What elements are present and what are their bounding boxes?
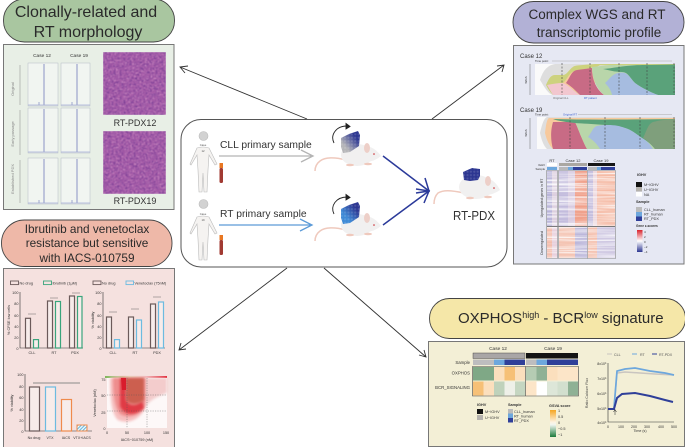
icon: CLL patient: Case: [200, 143, 207, 147]
heading: clonally-related and RT morphology: Clonally-related and: [15, 4, 157, 21]
GSVA heatmap: BCR_SIGNALING: [435, 385, 471, 390]
heading: OXPHOS high BCR low signature: high: [522, 310, 539, 320]
signature legend: −0.5: [558, 427, 566, 431]
arrow: center to morphology: [180, 66, 307, 119]
bar chart: venetoclax: 100: [95, 291, 102, 295]
signature legend: CLL_human: [514, 410, 535, 414]
bar chart: ibrutinib: 40: [14, 325, 18, 329]
synergy contour map: [93, 376, 169, 442]
heatmap legend: IGHV: [637, 173, 647, 177]
synergy contour map: Venetoclax (nM): [93, 389, 97, 417]
heatmap legend: M−IGHV: [644, 183, 659, 187]
synergy contour map: IACS−010759 (nM): [121, 438, 154, 442]
signature legend: Sample: [508, 403, 522, 407]
calcium flux line chart: 300: [644, 425, 650, 429]
bar chart: venetoclax: 60: [97, 314, 102, 318]
label: RT-PDX19: RT-PDX19: [114, 196, 156, 206]
synergy contour map: 50: [101, 394, 106, 398]
icon: RT patient: [190, 200, 217, 260]
synergy contour map: 100: [144, 431, 150, 435]
bar chart: combination: No drug: [28, 436, 40, 440]
signature legend: 0.5: [558, 415, 563, 419]
icon: engraftment arrow bottom: [333, 194, 350, 214]
bar chart: venetoclax: [91, 281, 167, 355]
bar chart: venetoclax: 80: [97, 302, 102, 306]
GSVA heatmap: Sample: [455, 360, 471, 365]
signature legend: GSVA score: [549, 404, 571, 408]
bar chart: combination: VTX+IACS: [73, 436, 91, 440]
calcium flux line chart: 400: [658, 425, 664, 429]
heading: complex WGS and RT transcriptomic profile: transcriptomic profile: [537, 25, 661, 40]
bar chart: venetoclax: PDX: [153, 351, 161, 355]
bar chart: venetoclax: No drug: [102, 282, 116, 286]
bar chart: venetoclax: 0: [99, 347, 102, 351]
signature legend: RT_PDX: [514, 419, 529, 423]
heatmap legend: NA: [644, 193, 650, 197]
heatmap legend: Sample: [636, 200, 650, 204]
signature legend: [477, 403, 571, 437]
clonal evolution fishplot: case 19: WGS: [524, 129, 528, 137]
synergy contour map: 0: [106, 431, 108, 435]
synergy contour map: 150: [163, 431, 169, 435]
heading: ibrutinib and venetoclax resistance: [2, 220, 172, 266]
clonal evolution fishplot: case 12: Original CLL: [553, 96, 569, 100]
calcium flux line chart: RT-PDX: [659, 353, 673, 357]
bar chart: ibrutinib: RT: [52, 351, 57, 355]
icon: RT patient: Case: [200, 212, 207, 216]
panel: drug response: [4, 268, 174, 447]
heatmap legend: U−IGHV: [644, 188, 659, 192]
heatmap legend: 2: [644, 235, 646, 239]
calcium flux line chart: Ratio Calcium Flux: [585, 378, 589, 408]
calcium flux line chart: Time (s): [633, 429, 647, 433]
heading: OXPHOS high BCR low signature: OXPHOS: [458, 310, 522, 327]
heading: ibrutinib and venetoclax resistance: with IACS-010759: [38, 251, 135, 265]
panel: signature: [428, 342, 684, 446]
GSVA heatmap: Case 12: [489, 346, 507, 352]
bar chart: ibrutinib: PDX: [71, 351, 79, 355]
bar chart: combination: 100: [17, 373, 24, 377]
heatmap legend: RT_human: [644, 212, 663, 216]
signature legend: 0: [558, 421, 560, 425]
icon: mouse with RT tumor: [315, 202, 381, 241]
signature legend: IGHV: [477, 403, 487, 407]
arrow: center to genomic profile: [432, 65, 504, 119]
calcium flux line chart: CLL: [614, 353, 621, 357]
calcium flux line chart: 200: [631, 425, 637, 429]
label: RT-PDX: RT-PDX: [453, 208, 495, 223]
clonality spectra plots: [10, 53, 90, 204]
arrow: CLL sample to mouse: [219, 150, 313, 162]
clonal evolution fishplot: case 19: Case 19: [520, 108, 543, 114]
clonal evolution fishplot: case 12: WGS: [524, 76, 528, 84]
bar chart: combination: 0: [21, 430, 24, 434]
bar chart: ibrutinib: 60: [14, 314, 18, 318]
calcium flux line chart: RT: [640, 353, 646, 357]
bar chart: ibrutinib: 20: [14, 336, 18, 340]
signature legend: M−IGHV: [485, 410, 500, 414]
heatmap legend: 0: [644, 240, 646, 244]
bar chart: ibrutinib: CLL: [29, 351, 35, 355]
bar chart: combination: [10, 373, 92, 440]
icon: CLL blood tube: [220, 163, 223, 183]
heading: complex WGS and RT transcriptomic profile: [513, 2, 684, 43]
clonality spectra plots: Early passage: [10, 121, 15, 147]
bar chart: venetoclax: RT: [132, 351, 138, 355]
expression heatmap: RT: [549, 158, 555, 163]
label: RT primary sample: RT primary sample: [220, 209, 307, 220]
synergy contour map: 25: [101, 411, 106, 415]
signature legend: 1: [558, 409, 560, 413]
clonal evolution fishplot: case 12: Time point:: [535, 59, 549, 63]
GSVA heatmap: Case 19: [544, 346, 562, 352]
heatmap legend: CLL_human: [644, 208, 665, 212]
bar chart: combination: VTX: [46, 436, 54, 440]
heatmap legend: Gene z-scores: [636, 224, 658, 228]
calcium flux line chart: 500: [671, 425, 677, 429]
clonality spectra plots: Case 19: [70, 53, 88, 59]
GSVA heatmap: [435, 346, 578, 396]
bar chart: venetoclax: 40: [97, 325, 102, 329]
heatmap legend: RT_PDX: [644, 217, 659, 221]
expression heatmap: [536, 158, 616, 258]
bar chart: combination: % viability: [10, 394, 14, 411]
bar chart: combination: 40: [19, 408, 24, 412]
bar chart: combination: IACS: [62, 436, 71, 440]
icon: RT blood tube: [220, 235, 223, 255]
bar chart: combination: 20: [19, 419, 24, 423]
icon: RT-PDX mouse: [434, 168, 500, 204]
panel: genomic profile: [514, 46, 684, 264]
calcium flux line chart: 5x10⁵: [597, 407, 607, 411]
bar chart: ibrutinib: Ibrutinib (1µM): [52, 282, 78, 286]
heading: clonally-related and RT morphology: [4, 0, 174, 42]
bar chart: combination: 80: [19, 385, 24, 389]
synergy contour map: 0: [103, 427, 106, 431]
expression heatmap: Upregulated genes in RT: [540, 178, 544, 217]
bar chart: venetoclax: % viability: [91, 311, 95, 328]
clonality spectra plots: Case 12: [33, 53, 51, 59]
label: CLL primary sample: CLL primary sample: [220, 140, 312, 151]
bar chart: ibrutinib: 100: [12, 291, 18, 295]
arrow: center to drug resistance: [179, 268, 287, 350]
bar chart: ibrutinib: [7, 281, 83, 355]
heading: complex WGS and RT transcriptomic profile: Complex WGS and RT: [528, 7, 666, 22]
heading: OXPHOS high BCR low signature: - BCR: [539, 310, 584, 327]
heading: ibrutinib and venetoclax resistance: Ibrutinib and venetoclax: [25, 222, 149, 236]
calcium flux line chart: 0: [607, 425, 609, 429]
clonality spectra plots: Established PDX: [10, 164, 15, 194]
bar chart: venetoclax: CLL: [110, 351, 116, 355]
bar chart: ibrutinib: 80: [14, 302, 18, 306]
heading: ibrutinib and venetoclax resistance: resistance but sensitive: [26, 236, 149, 250]
signature legend: −1: [558, 433, 562, 437]
icon: RT patient: 19: [201, 218, 205, 222]
clonal evolution fishplot: case 19: Original RT: [563, 112, 577, 116]
heatmap legend: −2: [644, 245, 648, 249]
heatmap legend: 4: [644, 230, 646, 234]
heatmap legend: [636, 173, 665, 254]
bar chart: venetoclax: 20: [97, 336, 102, 340]
signature legend: U−IGHV: [485, 416, 500, 420]
bar chart: combination: 60: [19, 396, 24, 400]
arrows: mice to RT-PDX: [383, 156, 429, 225]
clonal evolution fishplot: case 12: Case 12: [520, 54, 543, 60]
clonality spectra plots: Original: [10, 82, 15, 96]
expression heatmap: Case 19: [594, 158, 609, 163]
panel: PDX generation workflow: [181, 120, 507, 267]
clonal evolution fishplot: case 12: RT patient: [584, 96, 597, 100]
expression heatmap: Downregulated: [540, 231, 544, 255]
calcium flux line chart: 8x10⁵: [597, 362, 607, 366]
clonal evolution fishplot: case 19: [520, 108, 675, 149]
histology image: RT-PDX19: [103, 131, 166, 194]
expression heatmap: Case 12: [566, 158, 581, 163]
bar chart: ibrutinib: No drug: [20, 282, 33, 286]
synergy contour map: 75: [101, 378, 106, 382]
heading: OXPHOS high BCR low signature: signature: [598, 310, 664, 327]
panel: morphology: [4, 44, 174, 210]
icon: engraftment arrow top: [333, 124, 350, 143]
arrow: RT sample to mouse: [219, 219, 312, 231]
clonal evolution fishplot: case 19: Time point:: [535, 112, 549, 116]
heading: clonally-related and RT morphology: RT morphology: [34, 24, 142, 41]
icon: mouse with CLL tumor: [315, 131, 381, 171]
expression heatmap: Sample: [536, 167, 545, 171]
heading: OXPHOS high BCR low signature: low: [584, 310, 598, 320]
calcium flux line chart: 6x10⁵: [597, 392, 607, 396]
clonal evolution fishplot: case 12: [520, 54, 675, 100]
calcium flux line chart: 4x10⁵: [597, 421, 607, 425]
histology image: RT-PDX12: [103, 52, 166, 115]
calcium flux line chart: 100: [618, 425, 624, 429]
signature legend: RT_human: [514, 414, 533, 418]
arrow: center to signature: [324, 268, 426, 357]
icon: CLL patient: 12: [201, 149, 205, 153]
expression heatmap: IGHV: [538, 163, 545, 167]
calcium flux line chart: 7x10⁵: [597, 377, 607, 381]
bar chart: venetoclax: Venetoclax (75nM): [134, 282, 167, 286]
heading: OXPHOS high BCR low signature: [430, 298, 685, 338]
calcium flux line chart: [585, 353, 677, 433]
bar chart: ibrutinib: 0: [16, 347, 18, 351]
icon: CLL patient: [190, 132, 217, 192]
label: RT-PDX12: RT-PDX12: [114, 118, 156, 128]
bar chart: ibrutinib: % CFSE low cells: [7, 305, 11, 335]
GSVA heatmap: OXPHOS: [452, 370, 470, 376]
heatmap legend: −4: [644, 250, 648, 254]
synergy contour map: 50: [125, 431, 129, 435]
